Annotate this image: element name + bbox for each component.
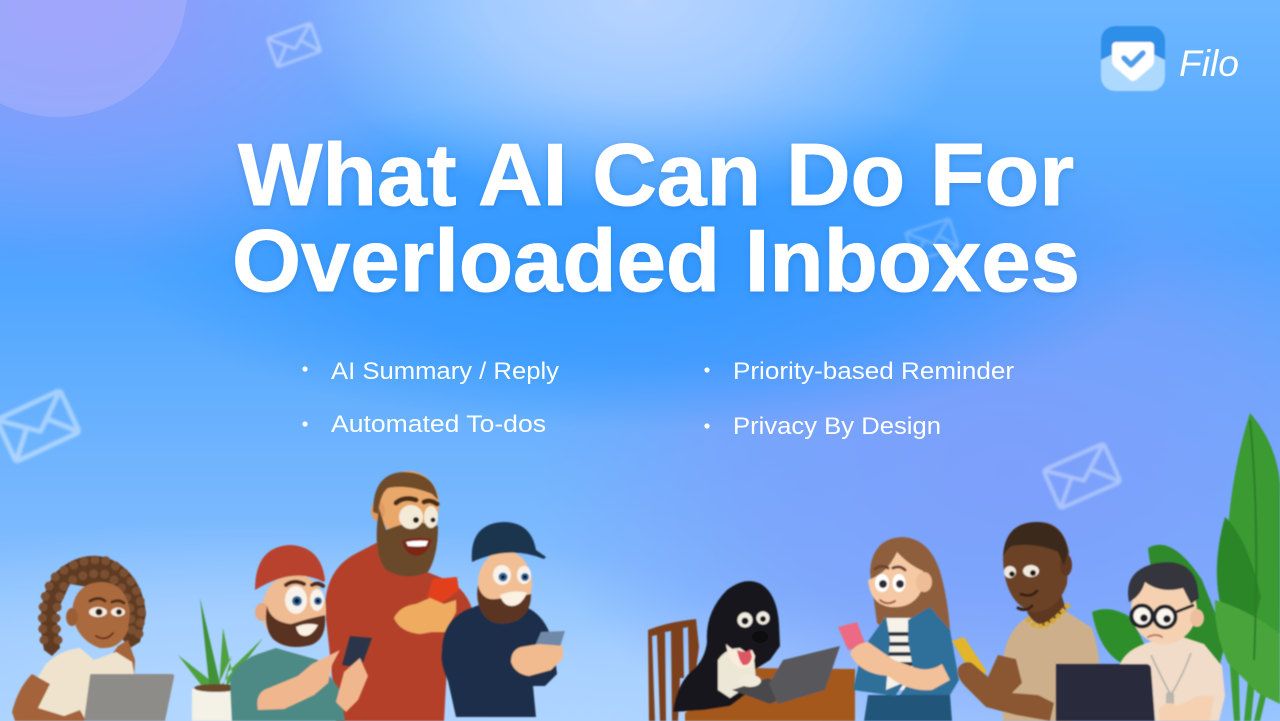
title: Overloaded Inboxes bbox=[232, 211, 1080, 310]
illustration: man with navy cap and phone bbox=[442, 522, 565, 717]
logo wordmark: Filo bbox=[1179, 43, 1239, 84]
illustration: boy with glasses and laptop bbox=[1056, 562, 1225, 721]
icon: Filo app icon bbox=[1101, 26, 1165, 91]
bullet list bbox=[302, 358, 1014, 440]
illustration: dog at a table with laptop bbox=[648, 581, 855, 721]
icon: envelope top bbox=[267, 23, 321, 67]
illustration: green plant leaves bbox=[1092, 413, 1280, 721]
chair bbox=[648, 619, 699, 721]
bullet: Priority-based Reminder: Priority-based Reminder bbox=[733, 358, 1014, 385]
bullet: Privacy By Design: Privacy By Design bbox=[733, 413, 941, 440]
icon: envelope behind title bbox=[905, 219, 959, 261]
decorative circle top-left bbox=[0, 0, 187, 117]
title bbox=[232, 125, 1080, 310]
bullet: Automated To-dos: Automated To-dos bbox=[331, 411, 546, 438]
icon: envelope left bbox=[0, 390, 79, 462]
illustration: tall man with red shirt and beard bbox=[325, 471, 475, 721]
illustration: man with red beanie pointing at phone bbox=[230, 545, 372, 721]
bullet: AI Summary / Reply: AI Summary / Reply bbox=[331, 358, 560, 385]
icon: envelope right bbox=[1043, 443, 1121, 509]
illustration: potted aloe plant bbox=[178, 598, 263, 721]
title: What AI Can Do For bbox=[238, 125, 1074, 224]
illustration: woman with long hair and pink phone bbox=[838, 537, 959, 721]
logo: Filo bbox=[1101, 26, 1239, 91]
illustration: man with gold chain and yellow phone bbox=[952, 522, 1100, 721]
illustration: woman with curly hair and laptop bbox=[12, 556, 174, 721]
